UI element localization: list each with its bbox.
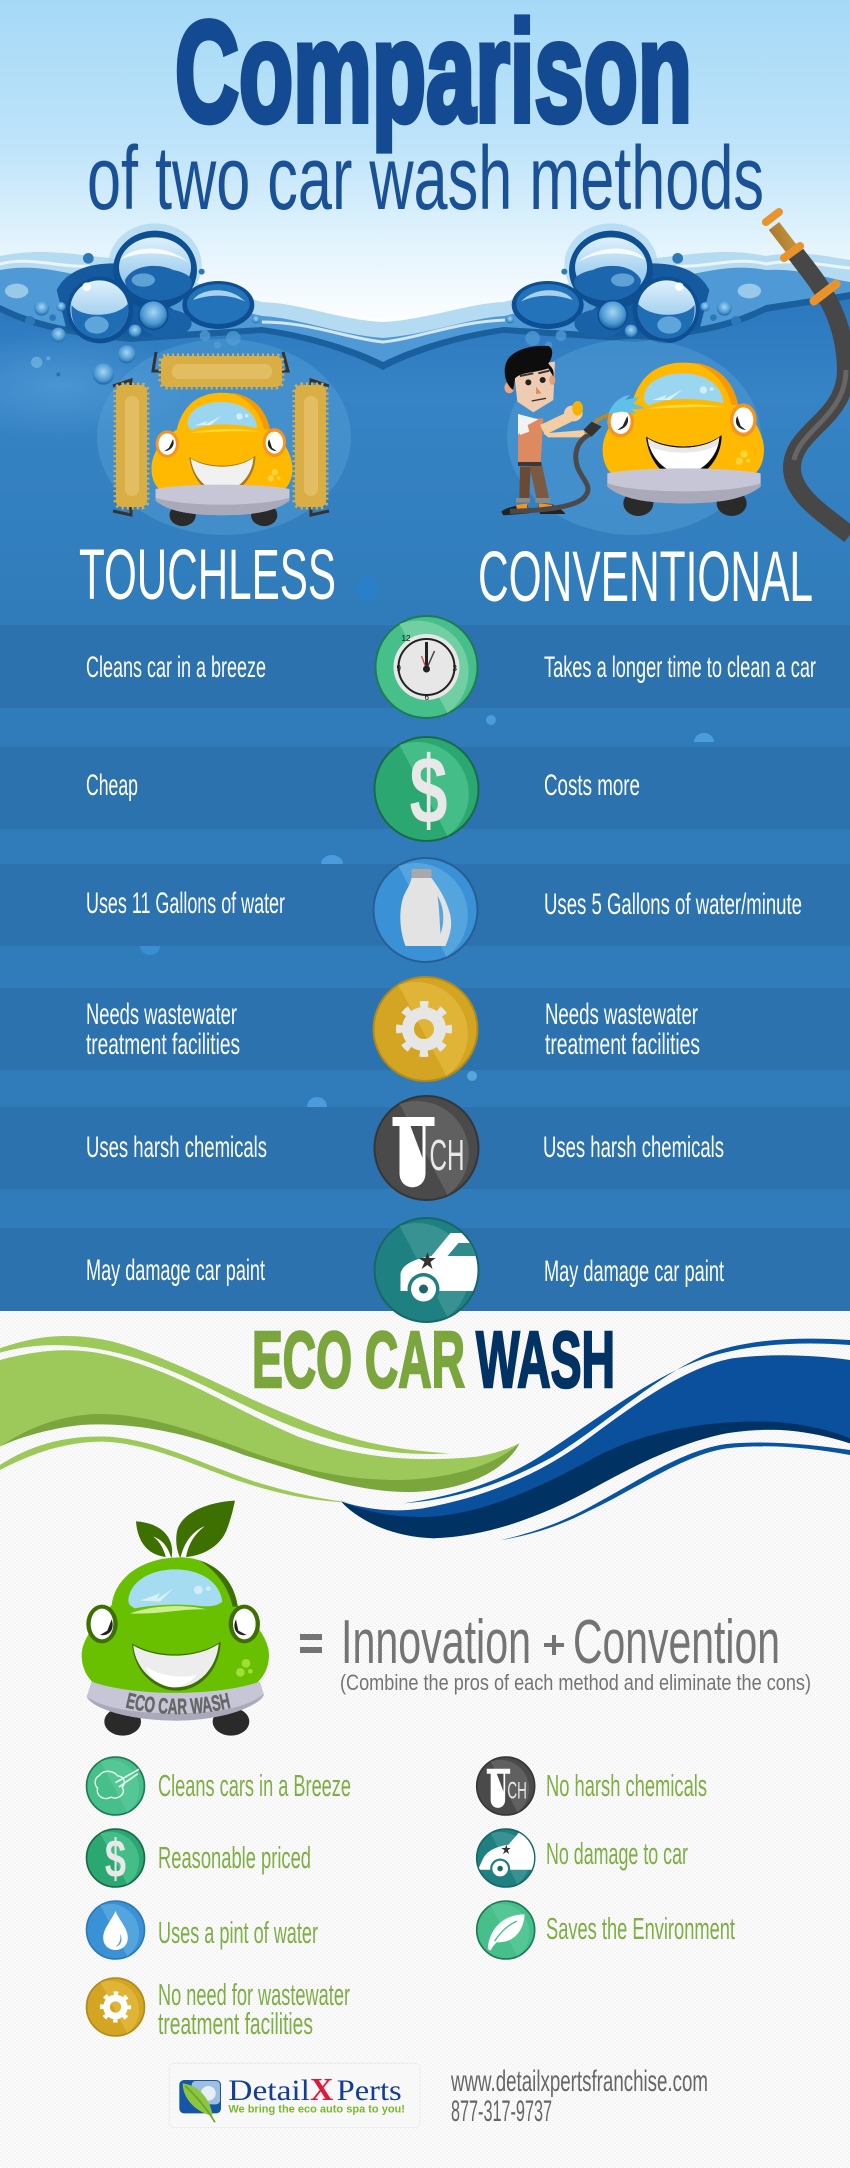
benefit: reasonable price xyxy=(87,1829,311,1889)
bumper label: ECO CAR WASH xyxy=(126,1692,230,1714)
icon: clock: 12 xyxy=(402,634,411,643)
row 5: chemicals: Uses harsh chemicals xyxy=(86,1131,267,1164)
water surface and sea xyxy=(0,252,850,1311)
heading: eco car wash: ECO CAR xyxy=(252,1315,465,1404)
benefit: cleans in a breeze xyxy=(87,1757,351,1815)
background: sky xyxy=(0,0,850,330)
eco car mascot xyxy=(82,1500,269,1736)
swoosh graphics xyxy=(0,1336,850,1540)
benefit: no wastewater facilities xyxy=(87,1977,350,2041)
icon: bottle xyxy=(374,858,478,962)
benefit: pint of water: Uses a pint of water xyxy=(158,1915,318,1950)
brush: top xyxy=(153,352,288,387)
icon: clock: 3 xyxy=(452,664,458,673)
yellow car, touchless xyxy=(151,393,292,526)
heading: eco car wash: WASH xyxy=(476,1315,615,1404)
logo: DetailXPerts xyxy=(169,2063,420,2128)
row 5: chemicals: Uses harsh chemicals xyxy=(543,1131,724,1164)
icon: dollar: $ xyxy=(410,737,448,844)
contact details xyxy=(450,2065,708,2128)
benefit: no damage xyxy=(477,1829,688,1887)
man washing car with hose xyxy=(501,346,609,515)
row 2: cost: Costs more xyxy=(544,769,640,802)
row 4: wastewater xyxy=(86,977,700,1081)
right bubble cluster xyxy=(506,223,762,349)
benefit: reasonable price: Reasonable priced xyxy=(158,1840,311,1875)
row 6: paint: May damage car paint xyxy=(86,1254,265,1287)
logo wordmark: Detail xyxy=(228,2074,310,2107)
leaves xyxy=(136,1501,235,1557)
comparison row bands xyxy=(0,625,850,1311)
row 4: wastewater: Needs wastewater xyxy=(545,998,698,1031)
logo wordmark xyxy=(228,2071,402,2107)
row 6: paint xyxy=(86,1218,724,1322)
row 2: cost: Cheap xyxy=(86,769,138,802)
row 3: water xyxy=(86,858,802,962)
icon: dollar xyxy=(374,737,478,844)
logo tagline: We bring the eco auto spa to you! xyxy=(228,2103,405,2115)
background: lower panel xyxy=(0,1311,850,2168)
logo wordmark: X xyxy=(310,2071,333,2107)
benefit: no damage: No damage to car xyxy=(546,1836,688,1871)
logo wordmark: Perts xyxy=(337,2074,402,2107)
icon: test tube: CH xyxy=(430,1131,464,1180)
row 6: paint: May damage car paint xyxy=(544,1255,724,1288)
logo mark: leaf xyxy=(179,2080,221,2122)
row 1: time: Cleans car in a breeze xyxy=(86,651,266,684)
icon: clock: 6 xyxy=(424,693,430,702)
benefit: no harsh chemicals xyxy=(477,1757,707,1815)
benefit: no harsh chemicals: CH xyxy=(507,1777,527,1804)
brush: left xyxy=(113,380,147,515)
icon: clock: 9 xyxy=(396,664,402,673)
benefit: saves the environment xyxy=(477,1901,735,1959)
row 1: time xyxy=(86,616,816,718)
icon: test tube xyxy=(374,1096,478,1200)
right large hose xyxy=(766,212,850,535)
contact details: 877-317-9737 xyxy=(451,2095,552,2128)
benefit: reasonable price: $ xyxy=(105,1830,126,1889)
conventional car wash illustration xyxy=(501,339,764,535)
brush: right xyxy=(295,380,329,515)
row 3: water: Uses 11 Gallons of water xyxy=(86,887,285,920)
row 4: wastewater: Needs wastewater xyxy=(86,998,237,1031)
row 2: cost xyxy=(86,737,640,844)
benefit: no wastewater facilities: treatment facilities xyxy=(158,2006,313,2041)
icon: clock xyxy=(376,616,478,718)
yellow car, conventional xyxy=(603,363,764,516)
left bubble cluster xyxy=(4,223,260,349)
icon: gear xyxy=(374,977,478,1081)
equation: innovation + convention: Innovation xyxy=(341,1608,531,1677)
icon: damaged car xyxy=(374,1218,486,1322)
benefit: no wastewater facilities: No need for wastewater xyxy=(158,1977,350,2012)
swoosh: green xyxy=(0,1336,519,1503)
benefit: no harsh chemicals: No harsh chemicals xyxy=(546,1768,707,1803)
benefit: cleans in a breeze: Cleans cars in a Breeze xyxy=(158,1768,351,1803)
row 4: wastewater: treatment facilities xyxy=(545,1028,700,1061)
floating water drops xyxy=(31,328,714,1107)
heading: touchless: TOUCHLESS xyxy=(79,536,336,615)
row 5: chemicals xyxy=(86,1096,724,1200)
equation: innovation + convention xyxy=(300,1608,811,1695)
benefit: pint of water xyxy=(87,1901,318,1959)
swoosh: blue xyxy=(342,1339,850,1540)
row 4: wastewater: treatment facilities xyxy=(86,1028,240,1061)
touchless car wash illustration xyxy=(97,339,351,535)
